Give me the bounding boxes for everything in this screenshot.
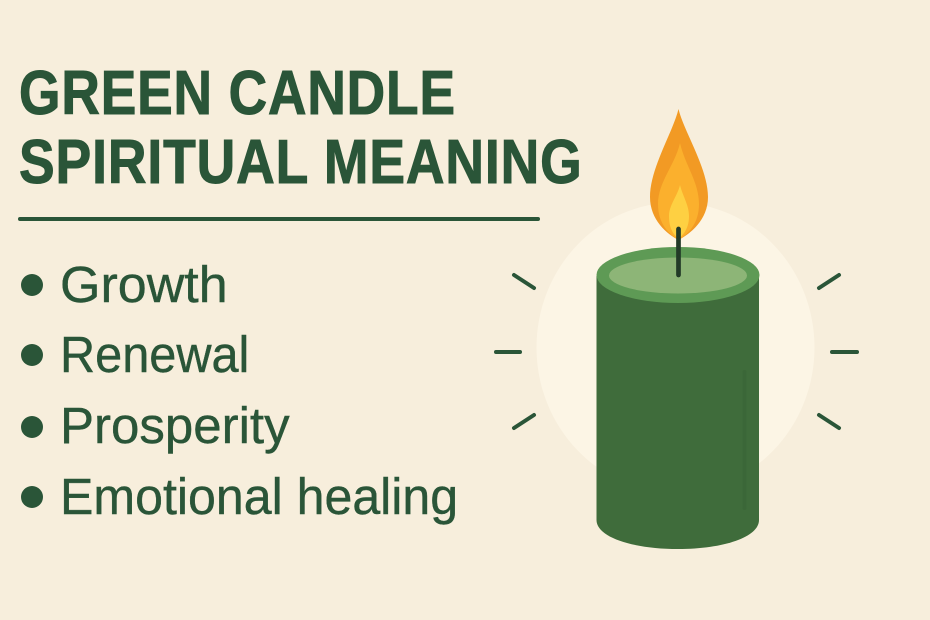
candle body [596,276,759,549]
text: emotional healing: Emotional healing [60,468,458,525]
glow circle [536,202,814,492]
bullet: prosperity [20,416,42,438]
list: meanings [21,256,458,525]
bullet: growth [20,274,42,296]
wax pool [609,258,747,294]
candle top rim [596,247,760,303]
title line 1: GREEN CANDLE [18,58,455,128]
title [18,58,582,196]
title divider [18,217,540,221]
text: prosperity: Prosperity [60,397,290,454]
title line 2: SPIRITUAL MEANING [18,128,582,196]
bullet: emotional healing [20,486,42,508]
candle side highlight [742,370,746,510]
bullet: renewal [20,344,42,366]
flame [650,109,708,240]
text: growth: Growth [60,256,228,313]
text: renewal: Renewal [60,326,249,383]
light rays [496,275,857,428]
wick [676,229,681,275]
